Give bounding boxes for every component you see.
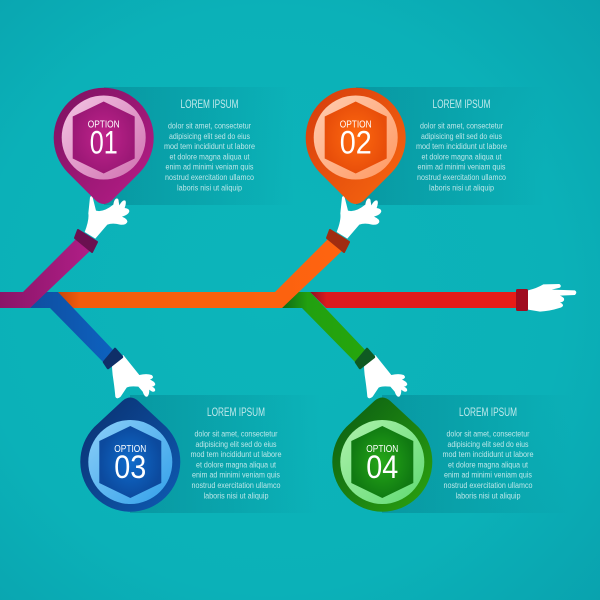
text block: option 02: mod tem incididunt ut labore [416, 141, 507, 151]
pin: option 02 [306, 88, 406, 204]
label: option 01: 01 [90, 124, 118, 160]
arm: blue arm [30, 292, 115, 363]
cuff: purple [75, 230, 97, 252]
hand: blue arm hand [112, 355, 155, 398]
panel: option 04 text backing [382, 395, 572, 513]
text block: option 01: dolor sit amet, consectetur [168, 120, 251, 130]
cuff: blue [104, 349, 122, 368]
text block: option 02: adipisicing elit sed do eius [421, 131, 502, 141]
text block: option 01: enim ad minimi veniam quis [166, 162, 254, 172]
text block: option 04: laboris nisi ut aliquip [456, 490, 521, 500]
hand: purple arm hand [85, 196, 129, 239]
pin: option 04 [332, 398, 432, 512]
text block: option 01: et dolore magna aliqua ut [170, 151, 250, 161]
hand: green arm hand [364, 355, 407, 398]
hand: pointing right [528, 284, 576, 312]
label: option 03: 03 [114, 449, 146, 485]
arm: orange arm [58, 238, 342, 308]
text block: option 03: mod tem incididunt ut labore [190, 449, 282, 459]
label: option 02: OPTION [340, 118, 372, 130]
text block: option 04: enim ad minimi veniam quis [444, 470, 532, 480]
text block: option 01 [164, 99, 255, 192]
cuff: orange [327, 230, 349, 252]
label: option 04: 04 [366, 449, 398, 485]
text block: option 03: et dolore magna aliqua ut [196, 459, 276, 469]
cuff: green [356, 349, 374, 368]
text block: option 03: nostrud exercitation ullamco [192, 480, 281, 490]
arm: green arm [282, 292, 367, 363]
text block: option 04: mod tem incididunt ut labore [442, 449, 534, 459]
pin: option 03 [80, 398, 180, 512]
text block: option 02: et dolore magna aliqua ut [422, 151, 502, 161]
text block: option 03: laboris nisi ut aliquip [204, 490, 269, 500]
text block: option 04: dolor sit amet, consectetur [446, 428, 530, 438]
panel: option 02 text backing [356, 87, 546, 205]
text block: option 04 [442, 407, 534, 500]
text block: option 02: nostrud exercitation ullamco [417, 172, 506, 182]
panel: option 03 text backing [130, 395, 320, 513]
text block: option 02: laboris nisi ut aliquip [429, 182, 494, 192]
text block: option 04: adipisicing elit sed do eius [448, 439, 528, 449]
text block: option 01: adipisicing elit sed do eius [169, 131, 250, 141]
text block: option 03: dolor sit amet, consectetur [194, 428, 278, 438]
text block: option 02: dolor sit amet, consectetur [420, 120, 503, 130]
text block: option 02 [416, 99, 507, 192]
cuff: red [516, 289, 528, 311]
text block: option 03: enim ad minimi veniam quis [192, 470, 280, 480]
text block: option 03: adipisicing elit sed do eius [196, 439, 276, 449]
text block: option 02: LOREM IPSUM [432, 99, 490, 111]
label: option 01: OPTION [88, 118, 120, 130]
label: option 01 [88, 118, 120, 160]
text block: option 03: LOREM IPSUM [207, 407, 265, 419]
arm: purple arm [0, 238, 90, 308]
label: option 03: OPTION [114, 443, 146, 455]
text block: option 01: nostrud exercitation ullamco [165, 172, 254, 182]
text block: option 04: LOREM IPSUM [459, 407, 517, 419]
hand: orange arm hand [337, 196, 381, 239]
pin: option 01 [54, 88, 154, 204]
label: option 04: OPTION [366, 443, 398, 455]
text block: option 01: LOREM IPSUM [180, 99, 238, 111]
text block: option 04: et dolore magna aliqua ut [448, 459, 528, 469]
text block: option 01: laboris nisi ut aliquip [177, 182, 242, 192]
panel: option 01 text backing [104, 87, 294, 205]
text block: option 04: nostrud exercitation ullamco [444, 480, 533, 490]
arm: red pointing arm [310, 292, 517, 308]
text block: option 02: enim ad minimi veniam quis [418, 162, 506, 172]
text block: option 01: mod tem incididunt ut labore [164, 141, 255, 151]
label: option 02: 02 [340, 124, 372, 160]
text block: option 03 [190, 407, 282, 500]
